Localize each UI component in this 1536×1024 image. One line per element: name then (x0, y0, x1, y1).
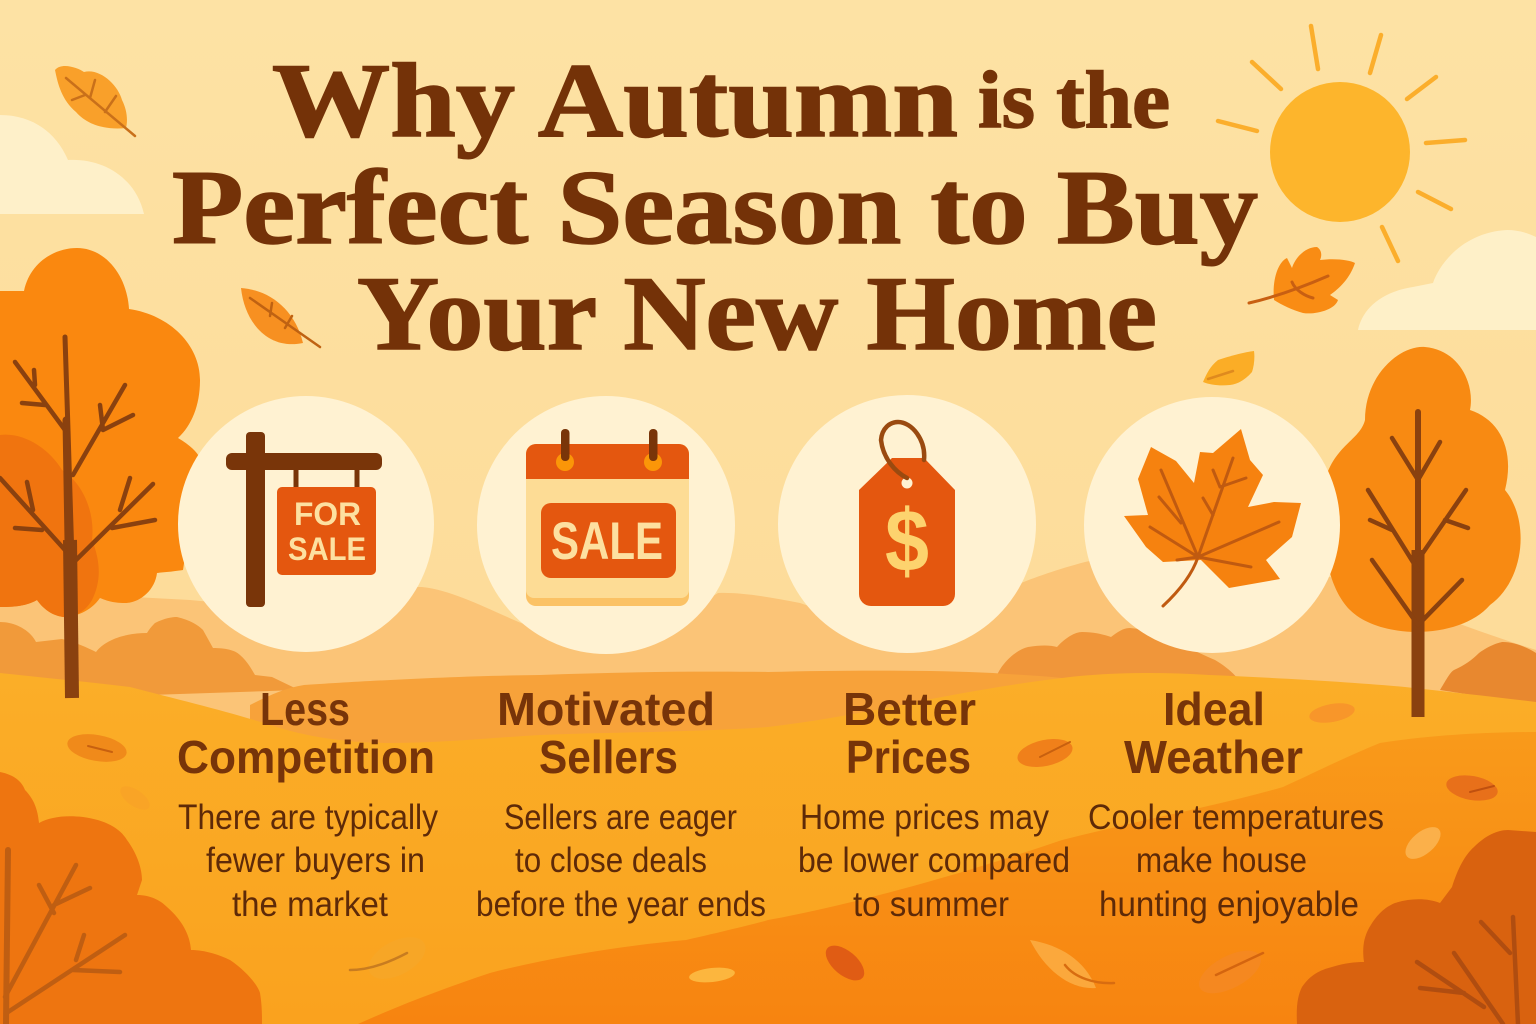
icon circle: maple leaf (1084, 397, 1340, 653)
column 4 text: Cooler temperatures (1088, 798, 1384, 837)
icon circle: price tag: $ (885, 491, 929, 590)
column 2 text: to close deals (515, 841, 707, 880)
leaf: below title left (241, 288, 320, 347)
column 3 text: be lower compared (798, 841, 1070, 880)
leaf: small falling (1203, 351, 1254, 385)
column 1 text: the market (232, 885, 388, 924)
column 4 text: hunting enjoyable (1099, 885, 1359, 924)
column 1 text: Less (260, 683, 350, 735)
tree: right (1323, 347, 1521, 717)
column 1 text (177, 683, 438, 924)
cloud left (0, 115, 144, 214)
leaf: under sun (1249, 247, 1355, 313)
meadow foreground (358, 732, 1536, 1024)
column 4 text: Weather (1124, 731, 1303, 783)
column 2 text: Sellers (539, 731, 678, 783)
column 1 text: fewer buyers in (206, 841, 425, 880)
tree: bottom left (0, 772, 262, 1024)
column 2 text (476, 683, 766, 924)
column 3 text: Prices (846, 731, 971, 783)
column 4 text (1088, 683, 1384, 924)
meadow main hill (0, 673, 1536, 1024)
title: is the (978, 54, 1170, 145)
icon circle: for sale sign (178, 396, 434, 652)
icon circle: sale calendar: SALE (551, 512, 663, 571)
column 2 text: Sellers are eager (504, 798, 737, 837)
shrubs left (0, 617, 299, 700)
column 3 text: Home prices may (800, 798, 1049, 837)
icon circle: for sale sign: FOR (294, 496, 361, 532)
shrub far right (1440, 642, 1536, 705)
scattered ground leaves (65, 700, 1500, 1002)
column 2 text: Motivated (497, 683, 715, 735)
meadow middle band (250, 671, 1080, 800)
title: Your New Home (357, 255, 1157, 372)
column 3 text: to summer (853, 885, 1009, 924)
tree: bottom right (1297, 830, 1536, 1024)
sun (1218, 26, 1465, 261)
title: Perfect Season to Buy (172, 149, 1258, 266)
tree: left (0, 248, 200, 698)
column 1 text: Competition (177, 731, 435, 783)
column 4 text: Ideal (1163, 683, 1265, 735)
column 1 text: There are typically (178, 798, 438, 837)
title: Why Autumn (272, 42, 958, 159)
icon circle: for sale sign: SALE (288, 531, 366, 567)
icon circle: price tag (778, 395, 1036, 653)
title (172, 42, 1258, 372)
shrubs right (996, 628, 1250, 700)
column 2 text: before the year ends (476, 885, 766, 924)
column 4 text: make house (1136, 841, 1307, 880)
leaf: top left (55, 66, 135, 136)
column 3 text (798, 683, 1070, 924)
column 3 text: Better (843, 683, 976, 735)
icon circle: sale calendar (477, 396, 735, 654)
far hills (0, 552, 1536, 800)
cloud right (1358, 230, 1536, 330)
